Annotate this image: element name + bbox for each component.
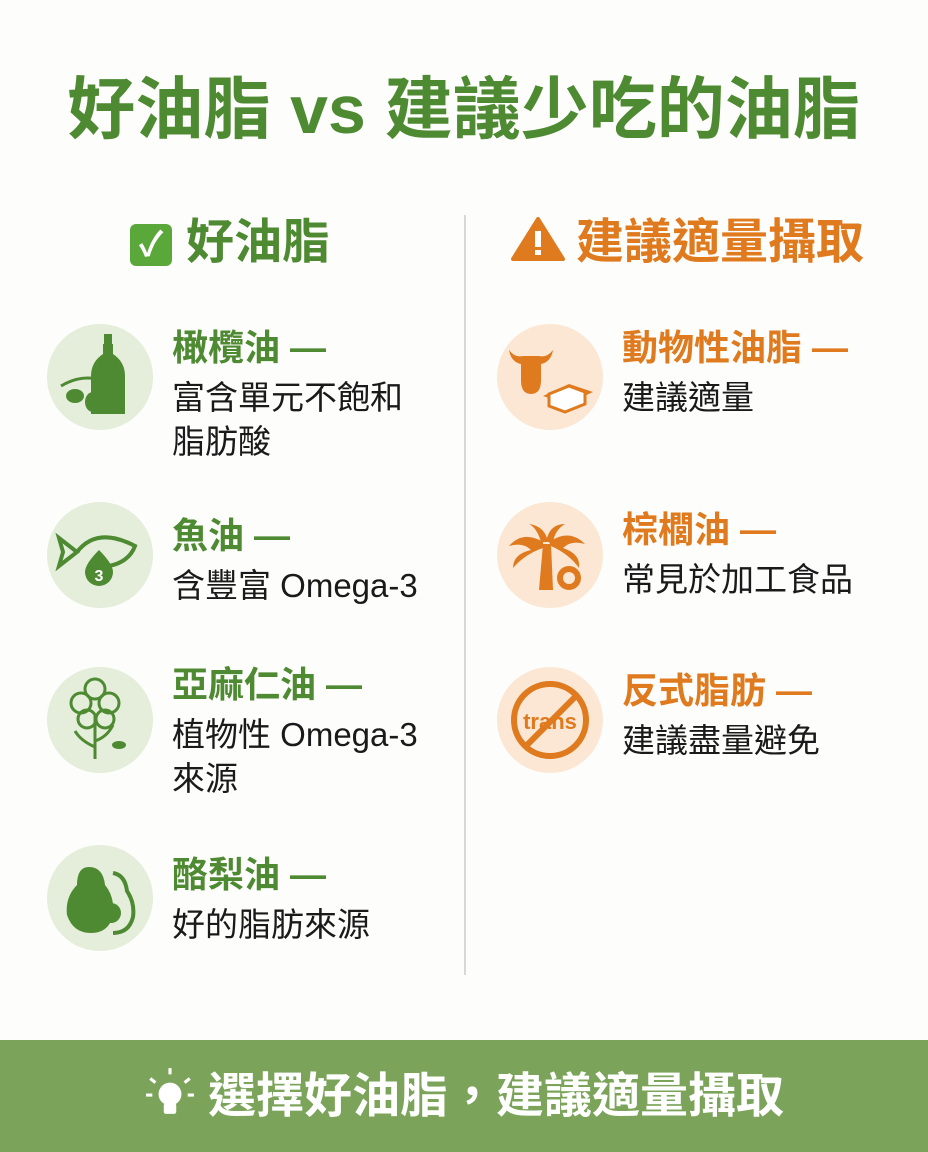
- item: flaxseed oil: 植物性 Omega-3: [172, 716, 418, 753]
- item: fish oil: 含豐富 Omega-3: [172, 567, 418, 604]
- item: fish oil: [47, 502, 418, 608]
- item: palm oil: 棕櫚油 —: [622, 509, 776, 550]
- icon: flower: [47, 667, 153, 773]
- icon: palm tree: [497, 502, 603, 608]
- heading: moderate: 建議適量攝取: [576, 216, 864, 269]
- banner text with bulb: 選擇好油脂，建議適量攝取: [208, 1070, 784, 1123]
- item: flaxseed oil: [47, 664, 418, 797]
- item: avocado oil: 酪梨油 —: [172, 854, 326, 895]
- icon: no trans: [497, 667, 603, 773]
- item: trans fat: [497, 667, 820, 773]
- banner: [0, 1040, 928, 1152]
- icon: fish: [47, 502, 153, 608]
- item: olive oil: [47, 324, 403, 460]
- item: palm oil: [497, 502, 853, 608]
- icon: cow and butter: [497, 324, 603, 430]
- heading: good fats: ✓: [139, 226, 163, 264]
- item: flaxseed oil: 亞麻仁油 —: [172, 664, 362, 705]
- item: avocado oil: [47, 845, 370, 951]
- icon: avocado: [47, 845, 153, 951]
- item: olive oil: 富含單元不飽和: [172, 379, 403, 416]
- item: avocado oil: 好的脂肪來源: [172, 906, 370, 943]
- item: trans fat: 反式脂肪 —: [622, 670, 812, 711]
- icon: no trans: trans: [523, 709, 577, 734]
- item: animal fat: 建議適量: [622, 379, 754, 416]
- divider: [464, 215, 466, 975]
- item: olive oil: 橄欖油 —: [172, 327, 326, 368]
- icon: olive oil: [47, 324, 153, 430]
- item: trans fat: 建議盡量避免: [622, 722, 820, 759]
- item: animal fat: 動物性油脂 —: [622, 327, 848, 368]
- heading: good fats: 好油脂: [186, 216, 330, 269]
- item: flaxseed oil: 來源: [172, 760, 238, 797]
- item: fish oil: 魚油 —: [172, 515, 290, 556]
- title: 好油脂 vs 建議少吃的油脂: [67, 72, 861, 148]
- icon: fish: 3: [95, 568, 104, 585]
- item: palm oil: 常見於加工食品: [622, 561, 853, 598]
- item: animal fat: [497, 324, 848, 430]
- item: olive oil: 脂肪酸: [172, 423, 271, 460]
